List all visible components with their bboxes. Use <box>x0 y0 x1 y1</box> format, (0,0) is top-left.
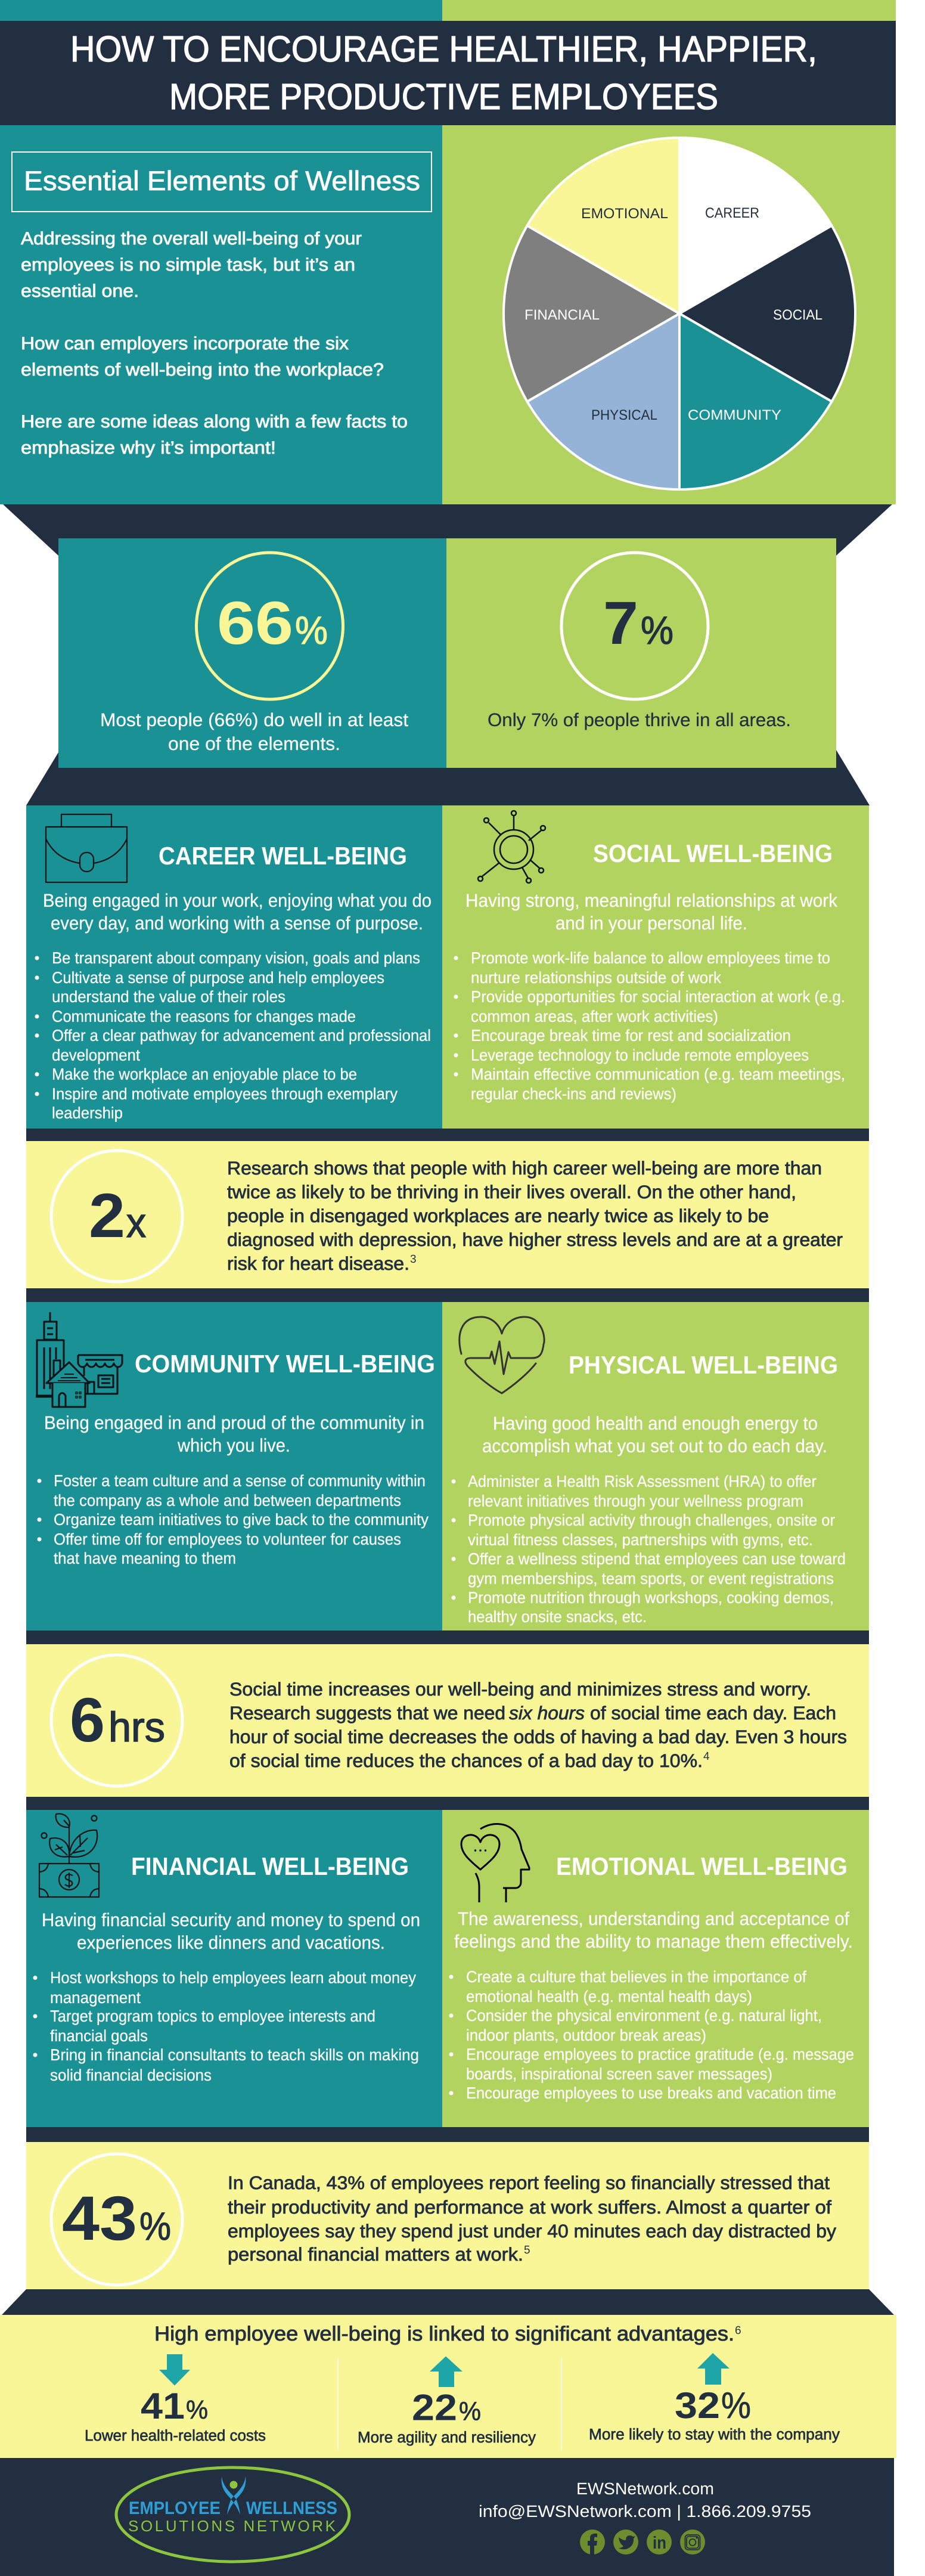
research text <box>227 1158 843 1274</box>
stat: 22% more agility: More agility and resiliency <box>358 2428 536 2446</box>
stat circle 7%: 7 <box>603 589 638 657</box>
stat: 22% more agility: % <box>459 2397 481 2426</box>
stat circle 2x: x <box>126 1199 146 1246</box>
callout: 6hrs <box>26 1644 869 1797</box>
bullet list: Offer time off for employees to volunteer for causes <box>54 1530 401 1548</box>
stat circle 7% <box>561 553 708 699</box>
bullet list: Promote work-life balance to allow employees time to <box>471 949 830 967</box>
heading: High employee well-being is linked to significant advantages. <box>154 2323 734 2345</box>
title: HOW TO ENCOURAGE HEALTHIER, HAPPIER, <box>70 29 817 69</box>
stat: 32% more likely to stay: 32 <box>675 2385 720 2426</box>
bullet list: Promote physical activity through challenges, onsite or <box>468 1511 835 1529</box>
research text: employees say they spend just under 40 minutes each day distracted by <box>228 2221 837 2242</box>
bullet list: Maintain effective communication (e.g. team meetings, <box>471 1065 845 1083</box>
heading: essential elements <box>12 152 432 212</box>
bullet list: Consider the physical environment (e.g. natural light, <box>466 2007 822 2025</box>
research text: Research suggests that we need <box>229 1703 505 1723</box>
caption: Only 7% of people thrive in all areas. <box>488 709 791 730</box>
bullet list: gym memberships, team sports, or event registrations <box>468 1570 834 1588</box>
research text: people in disengaged workplaces are nearly twice as likely to be <box>227 1205 769 1226</box>
stat: 22% more agility <box>358 2356 536 2446</box>
research text: Social time increases our well-being and minimizes stress and worry. <box>229 1679 811 1700</box>
research text: their productivity and performance at work suffers. Almost a quarter of <box>228 2197 831 2218</box>
bullet list: Bring in financial consultants to teach skills on making <box>50 2046 419 2064</box>
bullet list: indoor plants, outdoor break areas) <box>466 2026 706 2044</box>
footer <box>0 2458 894 2576</box>
pie chart: six elements: FINANCIAL <box>524 307 600 323</box>
bullet list: Provide opportunities for social interaction at work (e.g. <box>471 988 845 1006</box>
callout: 43% <box>26 2142 869 2289</box>
bullet list: Organize team initiatives to give back to the community <box>54 1511 429 1529</box>
stat circle 6hrs: hrs <box>108 1704 165 1750</box>
bullet list: Promote nutrition through workshops, cooking demos, <box>468 1589 834 1607</box>
icon: briefcase <box>46 814 127 882</box>
icon: city buildings <box>36 1312 122 1407</box>
research text: Research shows that people with high career well-being are more than <box>227 1158 822 1179</box>
intro text: essential one. <box>21 281 139 301</box>
stat: 41% lower costs: 41 <box>141 2386 185 2427</box>
panel: stat 66% <box>58 538 446 768</box>
icon: social media: in <box>653 2534 666 2553</box>
bullet list: nurture relationships outside of work <box>471 969 721 987</box>
research text: diagnosed with depression, have higher stress levels and are at a greater <box>227 1229 843 1250</box>
bullet list: Offer a wellness stipend that employees can use toward <box>468 1550 846 1568</box>
bullet list: Encourage employees to use breaks and vacation time <box>466 2084 836 2102</box>
bullet list: relevant initiatives through your wellness program <box>468 1492 803 1510</box>
bullet list: healthy onsite snacks, etc. <box>468 1608 647 1626</box>
pie chart: six elements: CAREER <box>705 205 759 221</box>
bullet list: Be transparent about company vision, goals and plans <box>52 949 420 967</box>
contact details: EWSNetwork.com <box>576 2479 714 2498</box>
bullet list: Foster a team culture and a sense of community within <box>54 1472 426 1490</box>
research text: twice as likely to be thriving in their lives overall. On the other hand, <box>227 1182 796 1202</box>
description: accomplish what you set out to do each day. <box>482 1436 827 1456</box>
description: every day, and working with a sense of purpose. <box>51 913 423 934</box>
stat circle 6hrs: 6 <box>70 1685 105 1755</box>
heading: 6 <box>735 2324 741 2337</box>
panel: stat 7% <box>446 538 836 768</box>
arrow: up <box>697 2353 730 2385</box>
panel: career well-being <box>26 805 442 1129</box>
description: which you live. <box>177 1435 290 1456</box>
panel: community well-being <box>26 1302 442 1630</box>
navy backdrop shape <box>3 504 892 805</box>
heading: CAREER WELL-BEING <box>159 842 407 870</box>
stat: 22% more agility: 22 <box>412 2387 457 2429</box>
bullet list: virtual fitness classes, partnerships with gyms, etc. <box>468 1531 813 1549</box>
title <box>0 21 896 125</box>
intro text: Addressing the overall well-being of your <box>21 229 362 249</box>
bullet list <box>37 1472 429 1567</box>
panel: physical well-being <box>442 1302 869 1630</box>
contact details <box>479 2479 811 2521</box>
stat circle 66%: % <box>295 608 328 652</box>
logo: WELLNESS <box>246 2498 337 2518</box>
logo <box>116 2467 349 2562</box>
bullet list: boards, inspirational screen saver messages) <box>466 2065 772 2083</box>
intro text <box>21 229 408 458</box>
description: Being engaged in and proud of the community in <box>44 1412 424 1433</box>
arrow: up <box>430 2356 462 2387</box>
research text: In Canada, 43% of employees report feeling so financially stressed that <box>228 2172 830 2193</box>
description <box>454 1908 853 1952</box>
research text: 5 <box>524 2244 530 2256</box>
stat: 32% more likely to stay: % <box>721 2385 751 2426</box>
bullet list: that have meaning to them <box>54 1549 236 1567</box>
contact details: info@EWSNetwork.com | 1.866.209.9755 <box>479 2502 811 2521</box>
pie chart: six elements: EMOTIONAL <box>581 206 668 222</box>
heading: SOCIAL WELL-BEING <box>593 839 833 867</box>
pie chart: six elements <box>504 138 855 489</box>
bullet list: Make the workplace an enjoyable place to be <box>52 1065 357 1083</box>
stat: 41% lower costs <box>85 2354 266 2444</box>
stat: 41% lower costs: Lower health-related costs <box>85 2426 266 2444</box>
icon: heart with pulse <box>460 1317 544 1393</box>
heading: essential elements: Essential Elements of Wellness <box>24 165 420 196</box>
bullet list: Target program topics to employee interests and <box>50 2007 375 2025</box>
bullet list: Encourage employees to practice gratitude (e.g. message <box>466 2045 854 2063</box>
bullet list: Host workshops to help employees learn about money <box>50 1969 416 1986</box>
bullet list <box>454 949 845 1103</box>
top colour band <box>0 0 896 21</box>
bullet list: the company as a whole and between departments <box>54 1492 401 1509</box>
bullet list: emotional health (e.g. mental health days) <box>466 1988 752 2005</box>
research text: risk for heart disease. <box>227 1253 409 1274</box>
caption <box>100 709 408 754</box>
research text <box>229 1679 847 1771</box>
bullet list: development <box>52 1046 140 1064</box>
research text: hour of social time decreases the odds of having a bad day. Even 3 hours <box>229 1726 847 1747</box>
description: and in your personal life. <box>555 913 747 934</box>
stat: 32% more likely to stay: More likely to stay with the company <box>589 2425 840 2443</box>
description: Having financial security and money to spend on <box>42 1909 420 1930</box>
intro text: emphasize why it’s important! <box>21 438 276 458</box>
bullet list: financial goals <box>50 2027 148 2045</box>
bullet list: Offer a clear pathway for advancement and professional <box>52 1027 431 1044</box>
bullet list <box>452 1473 846 1626</box>
bullet list: Encourage break time for rest and socialization <box>471 1027 791 1044</box>
description <box>43 890 432 934</box>
description <box>465 890 837 934</box>
heading: EMOTIONAL WELL-BEING <box>556 1852 848 1880</box>
bullet list <box>35 949 431 1122</box>
bullet list: solid financial decisions <box>50 2066 212 2084</box>
bullet list: leadership <box>52 1104 123 1122</box>
description <box>42 1909 420 1953</box>
bullet list: regular check-ins and reviews) <box>471 1085 676 1103</box>
navy column background <box>26 805 869 2289</box>
panel: emotional well-being <box>442 1810 869 2127</box>
stat circle 66% <box>197 553 343 699</box>
panel: intro <box>0 125 442 504</box>
bullet list <box>449 1968 854 2102</box>
caption: Most people (66%) do well in at least <box>100 709 408 730</box>
stat circle 6hrs <box>51 1655 182 1786</box>
callout: 2x <box>26 1141 869 1288</box>
pie chart: six elements: PHYSICAL <box>591 407 657 423</box>
bullet list: Communicate the reasons for changes made <box>52 1008 356 1025</box>
heading: COMMUNITY WELL-BEING <box>135 1350 435 1378</box>
stat circle 43%: 43 <box>62 2184 137 2253</box>
bullet list: Create a culture that believes in the importance of <box>466 1968 806 1986</box>
stat: 41% lower costs: % <box>186 2395 208 2425</box>
description: The awareness, understanding and acceptance of <box>458 1908 849 1929</box>
description: experiences like dinners and vacations. <box>77 1932 385 1953</box>
stat circle 43% <box>51 2154 182 2285</box>
intro text: Here are some ideas along with a few facts to <box>21 412 408 432</box>
description <box>44 1412 424 1456</box>
icon: social network <box>478 811 545 883</box>
description: Being engaged in your work, enjoying what you do <box>43 890 432 911</box>
research text <box>228 2172 837 2265</box>
research text: personal financial matters at work. <box>228 2244 523 2265</box>
research text: of social time each day. Each <box>590 1703 836 1723</box>
panel: advantages <box>0 2315 896 2458</box>
title: MORE PRODUCTIVE EMPLOYEES <box>169 76 718 117</box>
research text: of social time reduces the chances of a bad day to 10%. <box>229 1750 703 1771</box>
bullet list: Inspire and motivate employees through exemplary <box>52 1085 398 1103</box>
pie chart: six elements: SOCIAL <box>773 307 822 323</box>
logo: EMPLOYEE <box>129 2498 221 2518</box>
intro text: elements of well-being into the workplace? <box>21 360 384 380</box>
bullet list: understand the value of their roles <box>52 988 285 1006</box>
icon: money plant <box>39 1814 99 1897</box>
navy lower trapezoid <box>2 2289 894 2315</box>
stat circle 2x <box>51 1151 182 1282</box>
heading: PHYSICAL WELL-BEING <box>569 1351 838 1379</box>
research text: six hours <box>509 1703 585 1723</box>
stat circle 43%: % <box>139 2204 171 2248</box>
intro text: How can employers incorporate the six <box>21 334 349 354</box>
bullet list: Administer a Health Risk Assessment (HRA) to offer <box>468 1473 817 1490</box>
panel: pie background <box>442 125 896 504</box>
panel: financial well-being <box>26 1810 442 2127</box>
stat circle 2x: 2 <box>89 1181 125 1251</box>
bullet list: management <box>50 1989 141 2007</box>
panel: social well-being <box>442 805 869 1129</box>
caption: one of the elements. <box>168 733 340 754</box>
research text: 4 <box>703 1750 710 1763</box>
intro text: employees is no simple task, but it’s an <box>21 255 355 275</box>
bullet list: Leverage technology to include remote employees <box>471 1046 809 1064</box>
stat circle 7%: % <box>641 608 673 652</box>
heading: FINANCIAL WELL-BEING <box>131 1852 409 1880</box>
logo: SOLUTIONS NETWORK <box>128 2517 336 2535</box>
stat circle 66%: 66 <box>217 589 293 657</box>
description: feelings and the ability to manage them effectively. <box>454 1931 853 1952</box>
stat: 32% more likely to stay <box>589 2353 840 2443</box>
pie chart: six elements: COMMUNITY <box>688 407 781 423</box>
description: Having strong, meaningful relationships at work <box>465 890 837 911</box>
icon: head with heart <box>461 1824 529 1902</box>
description <box>482 1413 827 1456</box>
bullet list <box>33 1969 419 2084</box>
arrow: down <box>159 2354 190 2386</box>
research text: 3 <box>410 1253 417 1266</box>
icon: social media <box>580 2529 705 2555</box>
description: Having good health and enough energy to <box>493 1413 818 1434</box>
bullet list: Cultivate a sense of purpose and help employees <box>52 969 384 987</box>
bullet list: common areas, after work activities) <box>471 1008 718 1025</box>
